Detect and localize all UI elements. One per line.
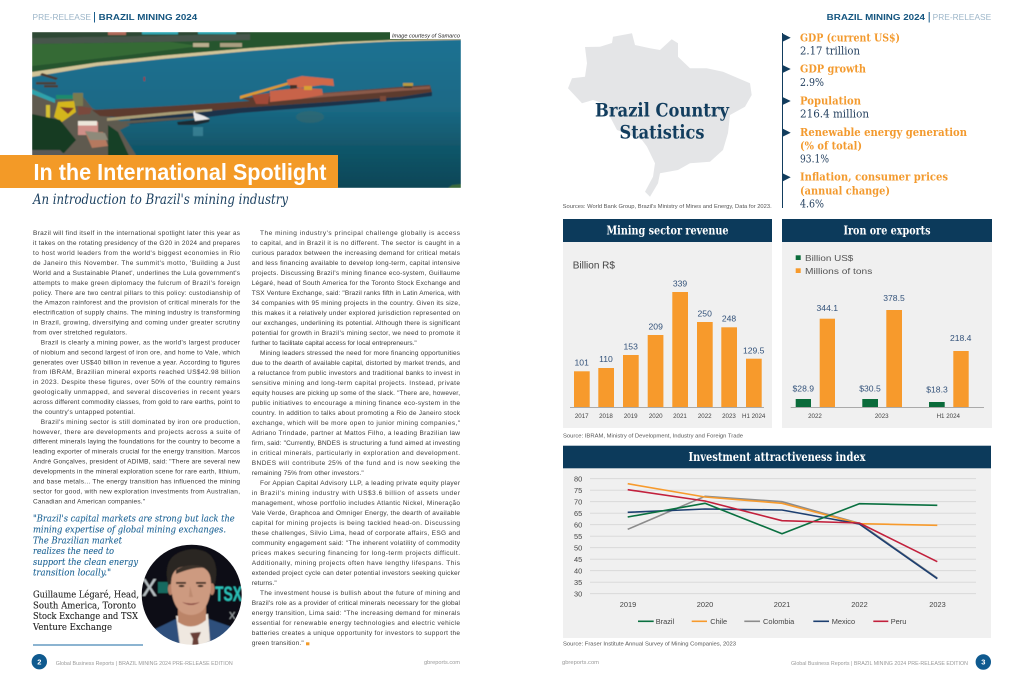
statistics source: Sources: World Bank Group, Brazil's Ministry of Mines and Energy, Data for 2023. [563,204,772,210]
pull quote: The Brazilian market [33,536,122,546]
article column 2: country. In addition to talks about promoting a Rio de Janeiro stock [252,410,461,417]
line chart legend: Mexico [832,617,855,626]
right page footer: Global Business Reports | BRAZIL MINING 2024 PRE-RELEASE EDITION [791,661,968,667]
portrait photo [141,544,243,646]
right page running header: PRE-RELEASE [933,13,991,22]
left page footer: 2 [37,657,41,666]
article column 2: management, whose portfolio includes Atlantic Nickel, Mineração [252,500,460,507]
article column 1 [33,230,241,505]
revenue chart source: Source: IBRAM, Ministry of Development, Industry and Foreign Trade [563,434,743,440]
right page footer: 3 [981,658,985,667]
line chart: 80 [574,474,582,483]
article column 2: public initiatives to encourage a mining finance eco-system in the [252,400,460,407]
bar chart: revenue: 209 [649,321,663,331]
line chart: 40 [574,566,582,575]
panel: iron ore exports: Iron ore exports [844,223,931,237]
bar chart: revenue: 129.5 [743,345,765,355]
line chart: 2022 [851,600,868,609]
line chart: 75 [574,486,582,495]
line chart legend [638,617,906,626]
index chart source: Source: Fraser Institute Annual Survey of Mining Companies, 2023 [563,642,736,648]
article column 1: the Amazon rainforest and the provision of critical minerals for the [33,300,240,307]
article column 2: The mining industry's principal challenge globally is access [260,230,461,237]
article column 2: to capital, and in Brazil it is no different. The sector is caught in a [252,240,460,247]
bar chart: revenue: 2022 [698,413,712,420]
article column 2: due to the dearth of available capital, distorted by market trends, and [252,360,460,367]
article column 2: essential for renewable energy technologies and electric vehicle [252,620,460,627]
article column 2: The investment house is bullish about the future of mining and [260,590,460,597]
article column 2: BNDES will contribute 25% of the fund and is now seeking the [252,460,460,467]
pier conveyors [92,85,432,118]
image credit: Image courtesy of Samarco [392,34,460,40]
bar chart: revenue: 2017 [575,413,589,420]
quote attribution: Venture Exchange [32,622,112,633]
heading: Brazil Country Statistics [595,100,730,143]
article column 2: green transition." [252,640,304,647]
article column 2: Adriano Trindade, partner at Mattos Filho, a leading Brazilian law [252,430,460,437]
bar chart: revenue: 2019 [624,413,638,420]
line chart: 70 [574,497,582,506]
bar chart: revenue: 2018 [599,413,613,420]
country statistics list: 93.1% [800,152,829,165]
line chart: 45 [574,555,582,564]
country statistics list: (% of total) [800,139,862,152]
article column 1: Canadian and American companies." [33,498,146,505]
article column 2: these challenges, Silvio Lima, head of corporate affairs, ESG and [252,530,460,537]
line chart legend: Brazil [656,617,675,626]
article column 2: further to facilitate capital access for local entrepreneurs." [252,340,417,347]
bar chart: iron ore: 344.1 [817,303,838,313]
country statistics list: 2.17 trillion [800,45,860,58]
quote attribution: Stock Exchange and TSX [33,611,138,622]
photo: iron ore pier in the bay [32,32,461,188]
article column 2: returns." [252,580,277,587]
article column 2: this makes it a relatively under explored jurisdiction represented on [252,310,460,317]
bar chart: revenue: 248 [722,314,736,324]
country statistics list: 2.9% [800,76,824,89]
left page footer: Global Business Reports | BRAZIL MINING 2024 PRE-RELEASE EDITION [56,661,233,667]
right page footer: gbreports.com [562,660,600,666]
pull quote [33,515,235,579]
article column 2: Mining leaders stressed the need for more financing opportunities [260,350,461,357]
line chart legend: Chile [710,617,727,626]
article column 1: developments in the mineral exploration scene for rare earth, lithium, [33,468,240,476]
left page footer [32,654,461,669]
buoy [144,77,145,81]
bar chart: iron ore: $30.5 [859,384,881,394]
article column 2: equity houses are picking up some of the slack. "There are, however, [252,390,460,397]
portrait photo: x [229,607,236,622]
bar chart: iron ore: H1 2024 [937,413,961,420]
country statistics list [782,31,967,210]
article column 2: curious paradox between the increasing demand for critical metals [252,250,461,257]
article column 1: the country's untapped potential. [33,409,135,416]
bar chart: iron ore: 2022 [808,413,822,420]
title banner: In the International Spotlight [34,159,327,185]
article column 2 [252,230,461,647]
pull quote: mining expertise of global mining exchanges. [33,525,226,535]
article column 1: sector for good, with new exploration investments from Australian, [33,488,240,495]
panel: mining sector revenue [563,219,772,428]
article column 2: and less financing available to develop long-term, capital intensive [252,260,460,267]
panel: investment attractiveness index: Investment attractiveness index [688,450,866,464]
bar chart: iron ore: 2023 [875,413,889,420]
line chart: 30 [574,589,582,598]
article column 2: For Appian Capital Advisory LLP, a leading private equity player [260,480,461,487]
bar chart: iron ore: $18.3 [926,385,948,395]
bar chart: revenue: 2021 [673,413,687,420]
panel: mining sector revenue: Billion R$ [573,259,615,271]
portrait photo: x [142,567,157,603]
left page running header [32,12,198,22]
article column 1: from IBRAM, Brazilian mineral exports reached US$42.98 billion [33,369,240,376]
chart legend: Millions of tons [805,266,872,276]
panel: iron ore exports [782,219,992,428]
bar chart: iron ore: $28.9 [793,384,814,394]
line chart legend: Peru [891,617,906,626]
article column 1: policy. There are two central pillars to this policy: custodianship of [33,290,240,297]
article column 1: World and a Sustainable Planet', underlines the Lula government's [33,270,241,277]
article column 1: leading exporter of minerals crucial for the energy transition. Marcos [33,449,241,456]
article column 1: in Brazil, growing, diversifying and coming under greater scrutiny [33,320,241,327]
chart legend: Billion US$ [805,253,854,263]
bar chart: iron ore: 218.4 [950,333,972,343]
bar chart: iron ore: 378.5 [883,293,905,303]
article column 2: Légaré, head of South America for the Toronto Stock Exchange and [252,280,460,287]
article column 1: de Janeiro this November. The summit's motto, 'Building a Just [33,260,240,267]
article column 2: TSX Venture Exchange, said: "Brazil ranks fifth in Latin America, with [252,290,460,297]
country statistics list: Inflation, consumer prices [800,171,948,184]
article column 2: community engagement said: "The inherent volatility of commodity [252,540,461,547]
article column 1: geologically unmapped, and several discoveries in recent years [33,389,241,396]
title banner [0,155,338,188]
small jetty [40,73,58,80]
country statistics list: (annual change) [800,184,890,197]
right page running header: BRAZIL MINING 2024 [827,13,926,22]
article column 2: 34 companies with 95 mining projects in the country. Given its size, [252,300,460,307]
country statistics list: 4.6% [800,197,824,210]
article column 1: different minerals laying the foundations for the country to become a [33,439,240,446]
portrait photo: TSX [215,583,242,606]
article column 1: generates over US$40 billion in revenue a year. According to figures [33,359,241,366]
pull quote: realizes the need to [33,547,115,557]
heading: Brazil Country Statistics: Statistics [620,121,704,143]
subtitle: An introduction to Brazil's mining industry [31,192,288,208]
country statistics list: Population [800,95,861,108]
article column 2: Vale Verde, Graphcoa and Omniger Energy, the dearth of available [252,510,460,517]
pull quote: support the clean energy [33,558,139,568]
article column 2: potential for growth in Brazil's mining sector, we need to promote it [252,330,460,337]
article column 2: energy transition, Lima said: "The increasing demand for minerals [252,610,461,617]
country statistics list: 216.4 million [800,108,869,121]
article column 2: remaining 75% from other investors." [252,470,364,477]
map of Brazil [568,33,752,197]
bar chart: revenue: 2023 [722,413,736,420]
article column 2: batteries creates a unique opportunity for investors to support the [252,630,460,637]
line chart: 2023 [929,600,946,609]
article column 2: exchange, which will be more open to junior mining companies," [252,420,461,427]
article column 2: extended project cycle can deter potential investors seeking quicker [252,570,461,577]
article column 2: sensitive mining and long-term capital projects. Instead, private [252,380,460,387]
bar chart: revenue: H1 2024 [742,413,766,420]
country statistics list: Renewable energy generation [800,126,967,139]
article column 1: and base metals... The energy transition has influenced the mining [33,478,240,486]
article column 1: Brazil's mining sector is still dominated by iron ore production, [41,419,240,426]
tugboat [177,118,210,125]
port land lower left [32,88,136,155]
article column 1: across different commodity classes, from gold to rare earths, point to [33,399,240,406]
ship loader machinery [239,82,288,100]
bar chart: revenue: 101 [575,358,589,368]
article column 2: capital for mining projects is being tackled head-on. Discussing [252,520,460,527]
left page footer: gbreports.com [424,660,461,666]
bar chart: iron ore [791,293,984,420]
image credit [390,32,461,40]
line chart: 50 [574,543,582,552]
line chart: 35 [574,578,582,587]
right page footer [562,654,991,670]
bar chart: revenue: 250 [698,309,712,319]
line chart: 60 [574,520,582,529]
line chart [574,474,976,626]
line chart: 2021 [774,600,790,609]
article column 1: in 2023. Despite these figures, over 50% of the country remains [33,379,241,386]
quote attribution: South America, Toronto [33,600,136,611]
line chart legend: Colombia [763,617,795,626]
pull quote: transition locally." [33,569,111,579]
bar chart: revenue: 110 [599,354,613,364]
line chart: 2020 [697,600,713,609]
bar chart: revenue [570,279,766,420]
bar chart: revenue: 2020 [649,413,663,420]
article column 1: Brazil is clearly a mining power, as the world's largest producer [41,339,241,346]
line chart: 65 [574,509,582,518]
article column 2: prices makes securing financing for long-term projects difficult. [252,550,460,557]
right page running header [827,12,991,22]
pull quote: "Brazil's capital markets are strong but lack the [33,515,235,525]
left page running header: PRE-RELEASE [32,13,91,22]
panel: mining sector revenue: Mining sector revenue [606,223,729,237]
article column 2: projects. Discussing Brazil's mining finance eco-system, Guillaume [252,270,460,277]
country statistics list: GDP (current US$) [800,31,900,44]
panel: investment attractiveness index [563,446,991,638]
heading: Brazil Country Statistics: Brazil Country [595,100,730,122]
article column 1: however, there are developments and projects across a suite of [33,429,240,436]
bar chart: revenue: 339 [673,279,687,289]
article column 2: in critical minerals, particularly in exploration and development. [252,450,460,457]
article column 2: a reluctance from public investors and traditional banks to invest in [252,370,460,377]
line chart: 2019 [620,600,636,609]
article column 2: firm, said: "Currently, BNDES is structuring a fund aimed at investing [252,440,460,447]
article column 1: electrification of supply chains. The mining industry is transforming [33,310,240,317]
article column 1: to host world leaders from the world's biggest economies in Rio [33,250,240,257]
country statistics list: GDP growth [800,63,866,76]
quote attribution: Guillaume Légaré, Head, [33,590,139,601]
left page running header: BRAZIL MINING 2024 [99,13,198,22]
article column 2: Brazil's role as a provider of critical minerals necessary for the global [252,600,461,607]
article column 2: Additionally, mining projects often have lengthy lifespans. This [252,560,461,567]
line chart: 55 [574,532,582,541]
bar chart: revenue: 153 [624,341,638,351]
quote attribution [32,590,143,646]
article column 1: of niobium and second largest of iron ore, and home to Vale, which [33,349,240,356]
article column 1: from over stretched regulators. [33,330,127,336]
article column 1: André Gonçalves, president of ADIMB, said: "There are several new [33,459,240,466]
article column 1: Brazil will find itself in the international spotlight later this year as [33,230,241,237]
article column 2: in Brazil's mining industry with US$3.6 billion of assets under [252,490,461,497]
chart legend [796,253,872,276]
article column 1: it takes on the rotating presidency of the G20 in 2024 and prepares [33,240,241,247]
land and forest [32,32,461,75]
article column 1: attempts to make green diplomacy the fulcrum of Brazil's foreign [33,280,240,287]
article column 2: our exchanges, underlining its potential. Although there is significant [252,320,460,327]
